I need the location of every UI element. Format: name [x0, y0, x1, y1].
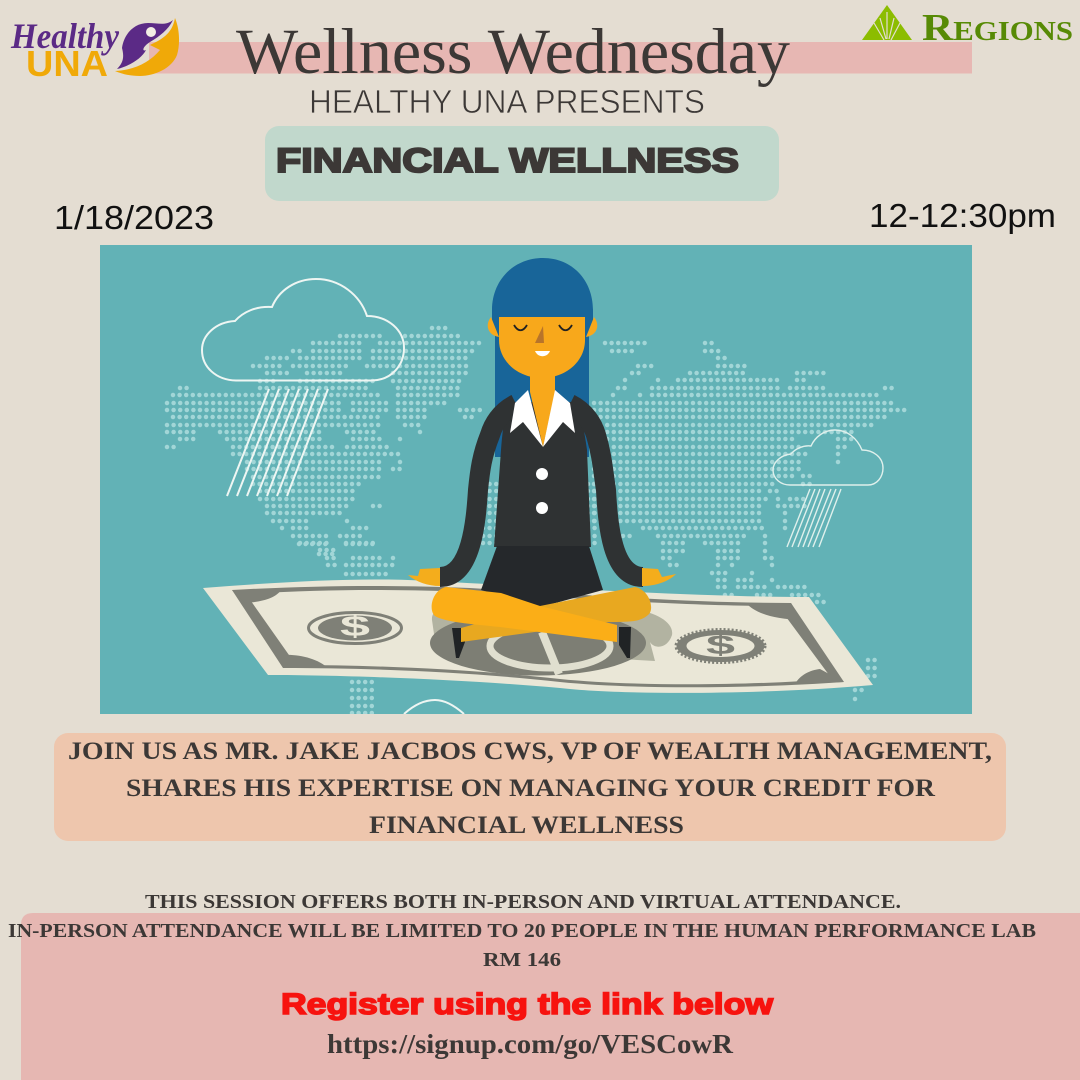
hands — [408, 568, 676, 586]
panel: speaker announcement: JOIN US AS MR. JAKE JACBOS CWS, VP OF WEALTH MANAGEMENT, — [68, 738, 992, 765]
panel: speaker announcement — [54, 733, 1006, 841]
neck — [530, 375, 555, 447]
hair — [492, 258, 593, 457]
eyes, nose and mouth — [514, 325, 572, 356]
skirt — [481, 546, 603, 607]
time: 12-12:30pm — [869, 197, 1056, 234]
logo: Healthy UNA — [10, 16, 179, 84]
medallion: left — [308, 611, 402, 644]
medallion: left: $ — [340, 611, 370, 643]
dollar bill — [203, 579, 873, 693]
panel: bottom registration area — [21, 913, 1080, 1080]
logo: Regions — [862, 5, 1073, 49]
illustration: meditating woman on a dollar bill — [100, 245, 972, 714]
panel: financial wellness heading: FINANCIAL WELLNESS — [276, 142, 739, 180]
title: Wellness Wednesday — [236, 16, 791, 88]
date: 1/18/2023 — [54, 199, 214, 236]
collar — [510, 390, 575, 447]
logo: Healthy UNA: Healthy — [10, 16, 120, 56]
legs — [461, 587, 651, 642]
medallion: right starburst: $ — [706, 630, 735, 660]
panel: pink title bar — [149, 42, 972, 74]
woman — [408, 258, 676, 658]
buttons — [536, 468, 548, 514]
attendance details — [8, 891, 1036, 971]
medallion: right starburst — [676, 630, 764, 662]
attendance details: THIS SESSION OFFERS BOTH IN-PERSON AND VIRTUAL ATTENDANCE. — [145, 891, 901, 913]
shoes — [452, 627, 631, 658]
registration call to action: Register using the link below — [281, 988, 774, 1021]
icon: large rain cloud — [202, 279, 404, 496]
icon: small rain cloud — [773, 430, 883, 547]
logo: Healthy UNA: UNA — [26, 43, 108, 84]
attendance details: RM 146 — [483, 949, 561, 971]
subtitle: HEALTHY UNA PRESENTS — [309, 83, 705, 120]
face — [499, 317, 585, 378]
medallion: center with shadow — [430, 613, 672, 676]
panel: speaker announcement: FINANCIAL WELLNESS — [369, 812, 684, 839]
panel: financial wellness heading — [265, 126, 779, 201]
icon: partial cloud at bottom — [404, 700, 464, 714]
panel: speaker announcement: SHARES HIS EXPERTISE ON MANAGING YOUR CREDIT FOR — [126, 775, 936, 802]
logo: Regions: REGIONS — [922, 7, 1073, 49]
torso — [494, 402, 591, 547]
attendance details: IN-PERSON ATTENDANCE WILL BE LIMITED TO 20 PEOPLE IN THE HUMAN PERFORMANCE LAB — [8, 920, 1036, 942]
registration link: https://signup.com/go/VESCowR — [327, 1029, 734, 1059]
ears — [488, 317, 597, 337]
world map dots — [167, 328, 908, 713]
arms — [440, 404, 643, 577]
